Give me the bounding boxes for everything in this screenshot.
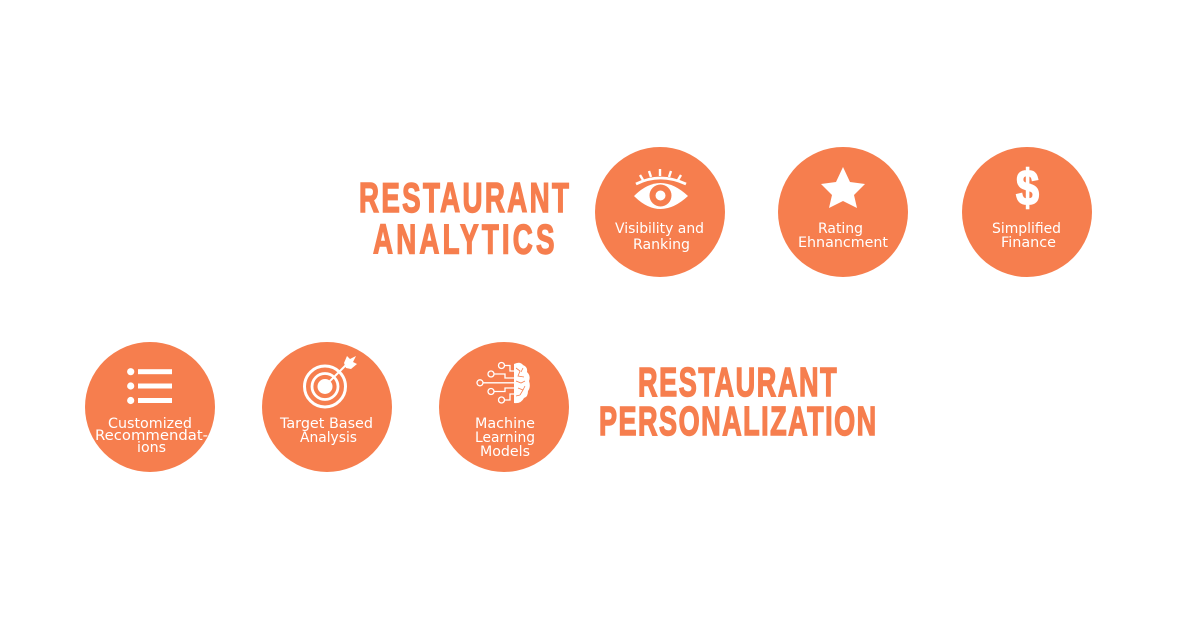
panel: simplified finance bbox=[962, 147, 1092, 277]
label: Finance bbox=[1001, 235, 1056, 251]
label bbox=[615, 221, 704, 253]
label: Ranking bbox=[633, 237, 690, 253]
heading: restaurant analytics bbox=[359, 174, 569, 263]
heading: restaurant analytics: RESTAURANT bbox=[359, 174, 569, 221]
icon: star bbox=[821, 167, 865, 208]
label bbox=[279, 416, 373, 446]
label: Machine bbox=[475, 416, 535, 432]
label: Visibility and bbox=[615, 221, 704, 237]
icon: target bbox=[304, 356, 357, 407]
panel: visibility and ranking bbox=[595, 147, 725, 277]
icon: eye bbox=[634, 169, 688, 209]
heading: restaurant analytics: ANALYTICS bbox=[373, 216, 555, 263]
label bbox=[992, 221, 1061, 251]
label: ions bbox=[137, 440, 166, 456]
label: Models bbox=[480, 444, 530, 460]
label: Rating bbox=[818, 221, 863, 237]
heading: restaurant personalization bbox=[599, 361, 876, 444]
label: Customized bbox=[108, 416, 192, 432]
label: Analysis bbox=[300, 430, 357, 446]
label: Ehnancment bbox=[798, 235, 889, 251]
panel: target based analysis bbox=[262, 342, 392, 472]
label: Recommendat- bbox=[95, 428, 208, 444]
panel: machine learning models bbox=[439, 342, 569, 472]
icon: list bbox=[127, 368, 172, 404]
heading: restaurant personalization: PERSONALIZATION bbox=[599, 400, 876, 444]
heading: restaurant personalization: RESTAURANT bbox=[638, 361, 837, 405]
panel: rating enhancement bbox=[778, 147, 908, 277]
panel: customized recommendations bbox=[85, 342, 215, 472]
icon: dollar: $ bbox=[1016, 160, 1039, 216]
label: Learning bbox=[475, 430, 535, 446]
label bbox=[95, 416, 208, 456]
label: Simplified bbox=[992, 221, 1061, 237]
label bbox=[798, 221, 889, 251]
icon: circuit brain bbox=[477, 362, 530, 403]
label bbox=[475, 416, 535, 460]
label: Target Based bbox=[279, 416, 373, 432]
